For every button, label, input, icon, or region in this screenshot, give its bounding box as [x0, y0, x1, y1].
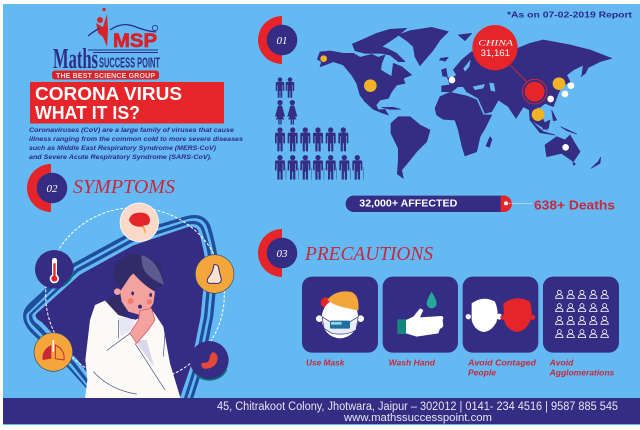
icon: nose — [195, 255, 234, 293]
precaution labels: Avoid — [549, 358, 574, 367]
logo tagline: THE BEST SCIENCE GROUP — [56, 73, 155, 80]
affected bar: 32,000+ AFFECTED — [359, 199, 458, 210]
icon: lungs — [34, 333, 73, 371]
logo wordmark: Maths — [53, 44, 98, 75]
hand — [130, 308, 155, 343]
robe — [85, 301, 181, 399]
card: use mask — [302, 277, 378, 353]
precaution labels: Use Mask — [306, 358, 345, 367]
logo emblem: MSP — [113, 31, 157, 52]
inland seas — [457, 59, 495, 92]
woman coughing — [85, 254, 181, 399]
precaution labels: People — [468, 369, 497, 378]
badge 02 — [27, 164, 67, 212]
precaution labels: Wash Hand — [389, 358, 436, 367]
China callout: 31,161 — [481, 48, 510, 58]
footer: www.mathssuccesspoint.com — [343, 412, 492, 424]
precaution labels: Agglomerations — [549, 369, 615, 378]
icon: brain — [120, 203, 159, 242]
precaution labels — [306, 358, 615, 378]
badge 02: 02 — [46, 183, 58, 195]
intro text — [29, 127, 243, 161]
icon: thermometer — [35, 250, 74, 289]
text: SUCCESS POINT — [99, 54, 160, 72]
hair — [106, 254, 164, 317]
yellow markers — [320, 55, 565, 121]
report date: *As on 07-02-2019 Report — [507, 10, 632, 20]
white markers — [449, 77, 574, 151]
China callout — [472, 25, 518, 70]
adults row — [275, 127, 348, 151]
badge 03 — [258, 229, 297, 277]
women row — [275, 100, 297, 125]
title: CORONA VIRUS — [35, 83, 182, 104]
men row — [276, 77, 294, 98]
logo — [52, 8, 160, 80]
intro text: such as Middle East Respiratory Syndrome (MERS-CoV) — [29, 145, 217, 152]
card: avoid agglomerations — [543, 277, 619, 353]
footer: 45, Chitrakoot Colony, Jhotwara, Jaipur – 302012 | 0141- 234 4516 | 9587 885 545 — [217, 401, 618, 413]
precaution labels: Avoid Contaged — [467, 358, 537, 367]
title: WHAT IT IS? — [35, 102, 140, 123]
europe asia africa oceania — [435, 33, 612, 168]
blob — [23, 215, 218, 398]
badge 01: 01 — [276, 35, 288, 47]
China callout: CHINA — [478, 37, 514, 47]
card: wash hand — [383, 277, 458, 353]
symptoms heading: SYMPTOMS — [73, 176, 175, 198]
intro text: illness ranging from the common cold to more severe diseases — [29, 136, 243, 143]
americas and greenland — [317, 27, 448, 178]
badge 03: 03 — [276, 248, 288, 260]
intro text: and Severe Acute Respiratory Syndrome (SARS-CoV). — [29, 154, 212, 161]
precautions heading: PRECAUTIONS — [304, 243, 433, 265]
badge 01 — [258, 16, 297, 64]
precautions cards — [302, 277, 619, 378]
elderly row — [275, 155, 363, 180]
intro text: Coronaviruses (CoV) are a large family of viruses that cause — [29, 127, 234, 134]
title — [30, 82, 224, 124]
card: avoid contagious people — [463, 277, 538, 353]
China marker — [510, 65, 547, 104]
world map — [317, 25, 612, 178]
face — [114, 288, 121, 295]
symptoms illustration — [23, 203, 234, 399]
robe folds — [93, 320, 165, 394]
affected bar — [346, 196, 615, 212]
footer — [3, 398, 640, 424]
deaths count: 638+ Deaths — [534, 198, 615, 212]
dashed orbit — [46, 208, 224, 382]
people pictogram — [275, 77, 363, 180]
icon: stomach — [190, 341, 229, 380]
